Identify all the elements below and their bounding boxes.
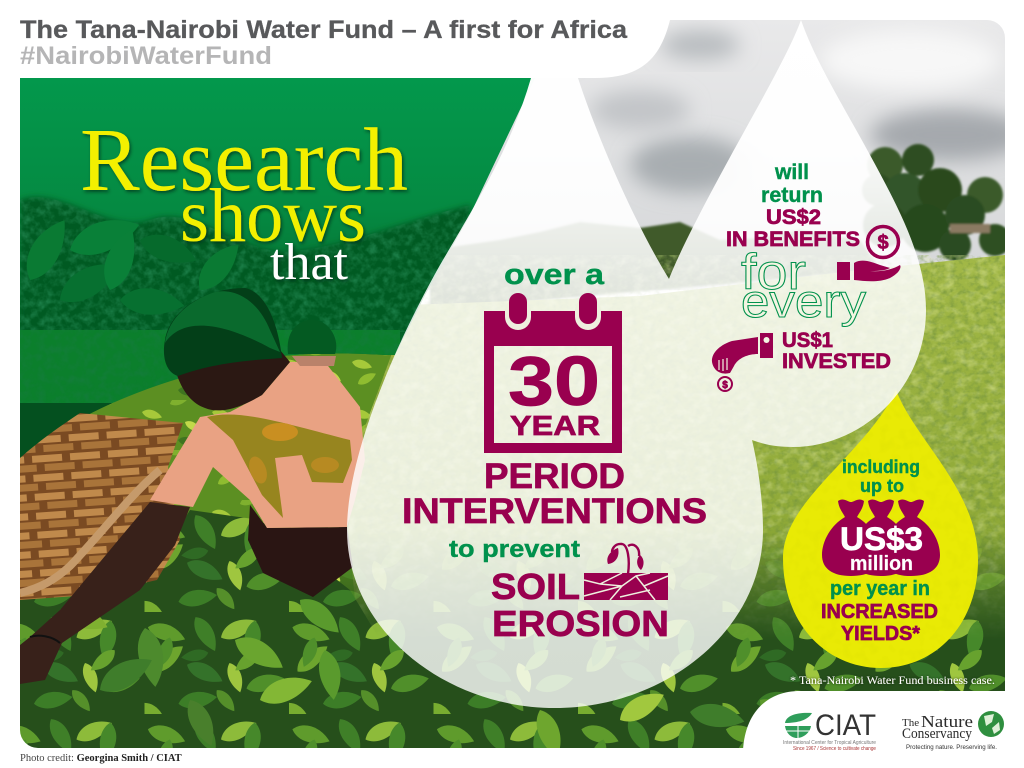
text: CIAT subtitle [783,740,876,752]
icon: calendar 30 year: YEAR [510,410,600,441]
photo: patterned scarf [207,414,352,518]
hashtag: #NairobiWaterFund [20,42,272,70]
icon: calendar 30 year [484,293,622,453]
logo panel background [743,691,1006,750]
icon: hand dropping coin [712,333,773,391]
icon: three money bags [822,499,940,576]
photo: woman picking tea [20,288,365,684]
photo: child on back [288,320,336,354]
text: for every outlined [741,244,866,327]
text: us$1 invested: US$1 [782,329,833,352]
text: including up to: including [842,457,920,477]
text: increased yields: YIELDS* [841,623,920,645]
photo: wicker basket strap [20,470,160,593]
text: CIAT wordmark: CIAT [815,709,876,742]
text: us$3 million: US$3 [840,521,923,557]
logo: CIAT [783,709,876,752]
text: CIAT subtitle: International Center for Tropical Agriculture [783,740,876,746]
text: period interventions: INTERVENTIONS [402,492,707,531]
title: The Tana-Nairobi Water Fund – A first for Africa [20,16,628,44]
icon: calendar 30 year: 30 [508,342,600,420]
photo: pink shirt [150,362,365,528]
text: us$1 invested: INVESTED [782,350,891,373]
footnote: * Tana-Nairobi Water Fund business case. [790,675,995,687]
text: for every outlined: for [741,244,806,300]
photo: cloudy sky [474,20,1005,264]
text: us$2 in benefits: US$2 [766,206,821,229]
panel: increased yields [821,457,940,645]
photo: wicker basket [20,413,183,600]
icon: coin above open hand [837,226,901,281]
text: will return: return [761,184,823,207]
photo: bright leaves behind woman [20,354,392,597]
text: will return [761,161,823,207]
text: period interventions [402,457,707,531]
text: will return: will [774,161,809,184]
text: us$2 in benefits: IN BENEFITS [726,228,860,251]
text: The Nature Conservancy wordmark [902,712,973,742]
text: tagline: Protecting nature. Preserving life. [906,744,997,751]
logo: The Nature Conservancy [902,711,1004,751]
text: The Nature Conservancy wordmark: The [902,717,919,729]
text: The Nature Conservancy wordmark: Conservancy [902,726,973,742]
text: CIAT subtitle: Since 1967 / Science to cultivate change [793,746,876,752]
text: per year in: per year in [830,578,930,600]
photo: distant tree line [430,144,1011,310]
drop: yellow yields [780,388,980,670]
heading: research shows that: shows [180,174,366,258]
text: us$3 million [840,521,923,575]
photo: outstretched arm [20,502,190,684]
photo: green-tinted upper left [17,78,560,463]
photo: foreground tea leaves [20,510,1005,748]
icon: green globe [978,711,1004,737]
text: to prevent: to prevent [449,536,580,563]
drops: white translucent large and medium [347,20,926,708]
text: soil erosion: EROSION [492,603,669,644]
photo: hand and bracelet [30,636,60,643]
text: including up to: up to [860,476,904,496]
icon: coin above open hand: $ [877,232,889,254]
panel: 30 year period [402,259,707,644]
white header tab [0,0,670,78]
text: increased yields: INCREASED [821,601,938,623]
heading: research shows that: that [270,234,349,291]
photo: face and neck [176,350,290,410]
title [20,16,628,70]
panel: return on investment [712,161,901,391]
photo: head wrap [164,288,282,376]
text: us$1 invested [782,329,891,373]
text: us$2 in benefits [726,206,860,251]
text: including up to [842,457,920,496]
text: us$3 million: million [850,553,913,575]
heading: research shows that: Research [80,111,408,210]
icon: CIAT leaf globe [785,713,812,738]
text: The Nature Conservancy wordmark: Nature [921,712,973,731]
text: increased yields [821,601,938,645]
heading: research shows that [80,111,408,291]
text: over a: over a [504,259,605,291]
photo credit: Photo credit: Georgina Smith / CIAT [20,753,182,764]
text: for every outlined: every [741,275,866,327]
photo: dark skirt [248,505,353,597]
photo: tea field [348,255,1005,636]
text: soil erosion [491,566,669,644]
icon: sprout in cracked soil [584,544,668,600]
text: period interventions: PERIOD [484,457,625,496]
icon: hand dropping coin: $ [722,380,728,391]
text: soil erosion: SOIL [491,566,580,607]
